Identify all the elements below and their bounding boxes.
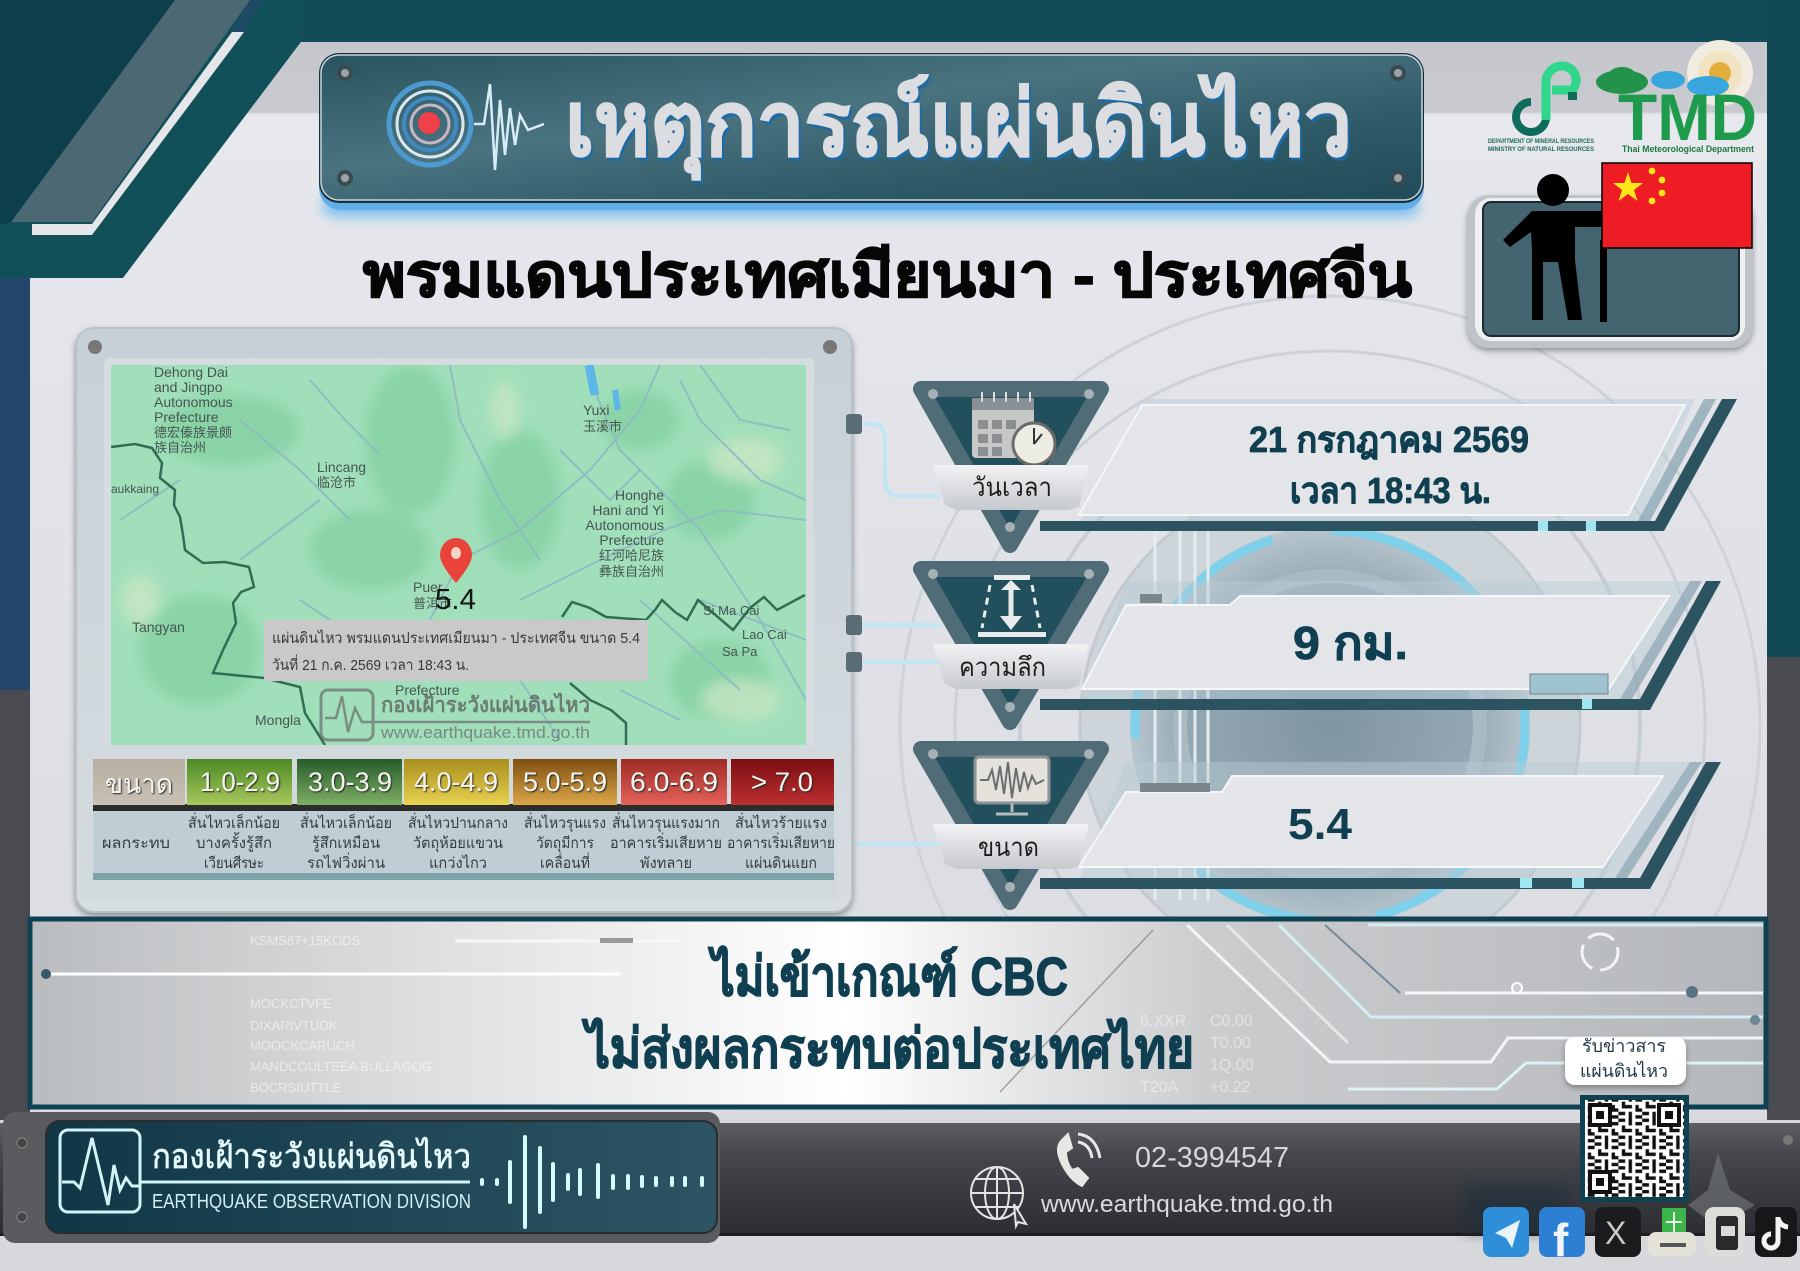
map labels: Honghe xyxy=(615,487,664,503)
icon: mobile xyxy=(1705,1207,1745,1257)
badge: depth: ความลึก xyxy=(959,652,1046,682)
map caption: แผ่นดินไหว พรมแดนประเทศเมียนมา - ประเทศจีน ขนาด 5.4 xyxy=(272,629,640,647)
map caption xyxy=(264,620,648,681)
news bubble: แผ่นดินไหว xyxy=(1580,1060,1668,1081)
table header labels: 6.0-6.9 xyxy=(630,767,718,797)
badge: magnitude xyxy=(921,749,1101,902)
map labels: Yuxi xyxy=(583,402,609,418)
pin magnitude: 5.4 xyxy=(435,584,476,616)
map labels: 玉溪市 xyxy=(583,419,622,434)
circuit decoration: C0.00 xyxy=(1210,1013,1253,1030)
map labels: Mongla xyxy=(255,712,301,728)
map xyxy=(111,364,806,745)
table impact text: รถไฟวิ่งผ่าน xyxy=(307,852,385,872)
table impact text: พังทลาย xyxy=(640,855,692,872)
icon: facebook: f xyxy=(1553,1214,1569,1266)
circuit decoration xyxy=(41,925,1763,1096)
map labels: Prefecture xyxy=(154,409,219,425)
circuit decoration: BOCRSIUTTLE xyxy=(250,1080,341,1095)
table impact text: อาคารเริ่มเสียหาย xyxy=(610,832,722,852)
table impact text: วัตถุห้อยแขวน xyxy=(413,835,503,853)
map labels: 族自治州 xyxy=(154,440,206,455)
circuit decoration: KSMS87+15KODS xyxy=(250,933,361,948)
table header labels: 3.0-3.9 xyxy=(308,767,392,797)
icon: depth arrow xyxy=(978,575,1046,637)
table impact text: บางครั้งรู้สึก xyxy=(196,832,272,852)
table impact text: เคลื่อนที่ xyxy=(540,852,590,872)
notice line 1: ไม่เข้าเกณฑ์ CBC xyxy=(708,945,1068,1007)
news bubble: รับข่าวสาร xyxy=(1582,1036,1666,1056)
map labels: Prefecture xyxy=(395,682,460,698)
news bubble xyxy=(1565,1036,1686,1085)
badge: date xyxy=(921,389,1101,545)
title text: เหตุการณ์แผ่นดินไหว xyxy=(565,73,1352,181)
panel: depth xyxy=(921,569,1721,722)
map labels: 普洱市 xyxy=(413,596,452,611)
icon: epicenter rings xyxy=(389,83,471,165)
icon: seismic wave xyxy=(474,84,544,170)
map caption: วันที่ 21 ก.ค. 2569 เวลา 18:43 น. xyxy=(272,654,469,674)
table impact text: รู้สึกเหมือน xyxy=(312,835,380,852)
date text: 21 กรกฎาคม 2569 xyxy=(1249,419,1529,460)
phone number: 02-3994547 xyxy=(1135,1142,1289,1174)
circuit decoration: 1Q.00 xyxy=(1210,1057,1254,1074)
map panel xyxy=(76,328,852,912)
table header labels: ขนาด xyxy=(105,769,173,799)
map labels: 临沧市 xyxy=(317,475,356,490)
logo: TMD xyxy=(1596,40,1757,154)
division name english: EARTHQUAKE OBSERVATION DIVISION xyxy=(152,1191,471,1213)
map labels xyxy=(111,364,787,728)
circuit decoration: DIXARIVTUDK xyxy=(250,1018,338,1033)
logo: DMR xyxy=(1488,66,1594,153)
map labels: Hani and Yi xyxy=(592,502,664,518)
tag: magnitude xyxy=(933,824,1089,869)
table header labels: 5.0-5.9 xyxy=(523,767,607,797)
magnitude table xyxy=(80,745,838,900)
icon: globe xyxy=(971,1167,1026,1226)
table impact text: สั่นไหวรุนแรง xyxy=(524,812,606,833)
banner: CBC notice xyxy=(30,919,1766,1107)
flag: China xyxy=(1602,163,1752,248)
table header labels: 1.0-2.9 xyxy=(200,767,280,797)
time text: เวลา 18:43 น. xyxy=(1290,470,1491,511)
map labels: Dehong Dai xyxy=(154,364,228,380)
footer bar xyxy=(0,1123,1800,1236)
map labels: 红河哈尼族 xyxy=(599,548,664,563)
circuit decoration: MOOCKCARUCH xyxy=(250,1038,355,1053)
map labels: Si Ma Cai xyxy=(703,603,759,618)
table impact text: แผ่นดินแยก xyxy=(745,855,817,872)
table impact text: แกว่งไกว xyxy=(429,854,487,872)
tag: date xyxy=(933,465,1089,510)
corner chevrons xyxy=(0,0,262,235)
table impact text: ผลกระทบ xyxy=(102,835,170,852)
icon: X xyxy=(1595,1207,1641,1257)
map labels: Lincang xyxy=(317,459,366,475)
icon: telegram xyxy=(1483,1207,1529,1257)
map labels: 彝族自治州 xyxy=(599,564,664,579)
decorative star xyxy=(1688,1153,1755,1232)
QR code xyxy=(1580,1095,1689,1202)
icon: map pin xyxy=(440,538,472,583)
icon: phone xyxy=(1058,1134,1100,1186)
circuit decoration: MANDCOULTEEA BULLAGOG xyxy=(250,1059,432,1074)
circuit decoration: T0.00 xyxy=(1210,1035,1251,1052)
table impact text: สั่นไหวรุนแรงมาก xyxy=(612,812,720,833)
background rings xyxy=(898,294,1762,916)
logo: DMR: MINISTRY OF NATURAL RESOURCES xyxy=(1488,147,1594,153)
website: www.earthquake.tmd.go.th xyxy=(1040,1191,1333,1218)
icon: facebook xyxy=(1539,1207,1585,1266)
circuit decoration: MOCKCTVFE xyxy=(250,996,332,1011)
badge: date: วันเวลา xyxy=(972,472,1052,502)
magnitude value: 5.4 xyxy=(1288,800,1353,849)
table impact text: สั่นไหวร้ายแรง xyxy=(735,812,827,832)
map watermark: กองเฝ้าระวังแผ่นดินไหว xyxy=(381,692,590,717)
badge: magnitude: ขนาด xyxy=(978,832,1039,862)
map watermark: www.earthquake.tmd.go.th xyxy=(380,723,590,742)
map watermark xyxy=(321,690,590,742)
table impact text: วัตถุมีการ xyxy=(536,835,594,853)
map labels: Tangyan xyxy=(132,619,185,635)
icon: X: X xyxy=(1605,1215,1626,1251)
icon: calendar and clock xyxy=(972,392,1055,465)
division name: กองเฝ้าระวังแผ่นดินไหว xyxy=(152,1137,471,1176)
title plate xyxy=(319,53,1424,217)
badge: depth xyxy=(921,569,1101,722)
social icons xyxy=(1483,1207,1797,1266)
icon: line device xyxy=(1648,1208,1696,1256)
connector bolts xyxy=(846,414,862,672)
connectors xyxy=(856,424,940,844)
table impact text: เวียนศีรษะ xyxy=(204,855,264,872)
badge: earthquake observation division xyxy=(3,1112,720,1243)
circuit decoration: +0.22 xyxy=(1210,1079,1251,1096)
table impact text xyxy=(102,812,835,872)
map labels: Prefecture xyxy=(599,532,664,548)
map labels: Sa Pa xyxy=(722,644,758,659)
table impact text: สั่นไหวปานกลาง xyxy=(408,812,508,832)
icon: person with pole xyxy=(1503,174,1607,322)
circuit decoration: T20A xyxy=(1140,1079,1179,1096)
map labels: and Jingpo xyxy=(154,379,223,395)
subtitle: พรมแดนประเทศเมียนมา - ประเทศจีน xyxy=(363,242,1412,309)
waveform bars xyxy=(482,1137,702,1227)
table header labels: > 7.0 xyxy=(751,767,813,797)
tag: depth xyxy=(933,644,1089,689)
table impact text: สั่นไหวเล็กน้อย xyxy=(188,812,280,832)
map labels: aukkaing xyxy=(111,482,159,496)
icon: waveform monitor xyxy=(975,757,1049,814)
map labels: Puer xyxy=(413,579,443,595)
table impact text: อาคารเริ่มเสียหาย xyxy=(727,832,835,852)
table header labels xyxy=(105,767,813,799)
country box xyxy=(1467,163,1753,348)
map labels: Lao Cai xyxy=(742,627,787,642)
circuit decoration: 6.XXR xyxy=(1140,1013,1186,1030)
plate screws xyxy=(339,67,1404,184)
table header cells xyxy=(93,759,834,805)
logo: TMD: TMD xyxy=(1618,80,1757,154)
panel: date and time xyxy=(921,389,1737,545)
icon: tiktok xyxy=(1755,1207,1797,1257)
map labels: Autonomous xyxy=(585,517,664,533)
notice line 2: ไม่ส่งผลกระทบต่อประเทศไทย xyxy=(582,1017,1194,1079)
panel: magnitude xyxy=(921,749,1721,902)
table header labels: 4.0-4.9 xyxy=(414,767,498,797)
map labels: Autonomous xyxy=(154,394,233,410)
icon: seismograph box xyxy=(60,1130,140,1212)
depth value: 9 กม. xyxy=(1293,617,1408,669)
logo: DMR: DEPARTMENT OF MINERAL RESOURCES xyxy=(1488,139,1594,145)
map labels: 德宏傣族景颇 xyxy=(154,425,232,440)
table impact text: สั่นไหวเล็กน้อย xyxy=(300,812,392,832)
logo: TMD: Thai Meteorological Department xyxy=(1622,144,1754,154)
